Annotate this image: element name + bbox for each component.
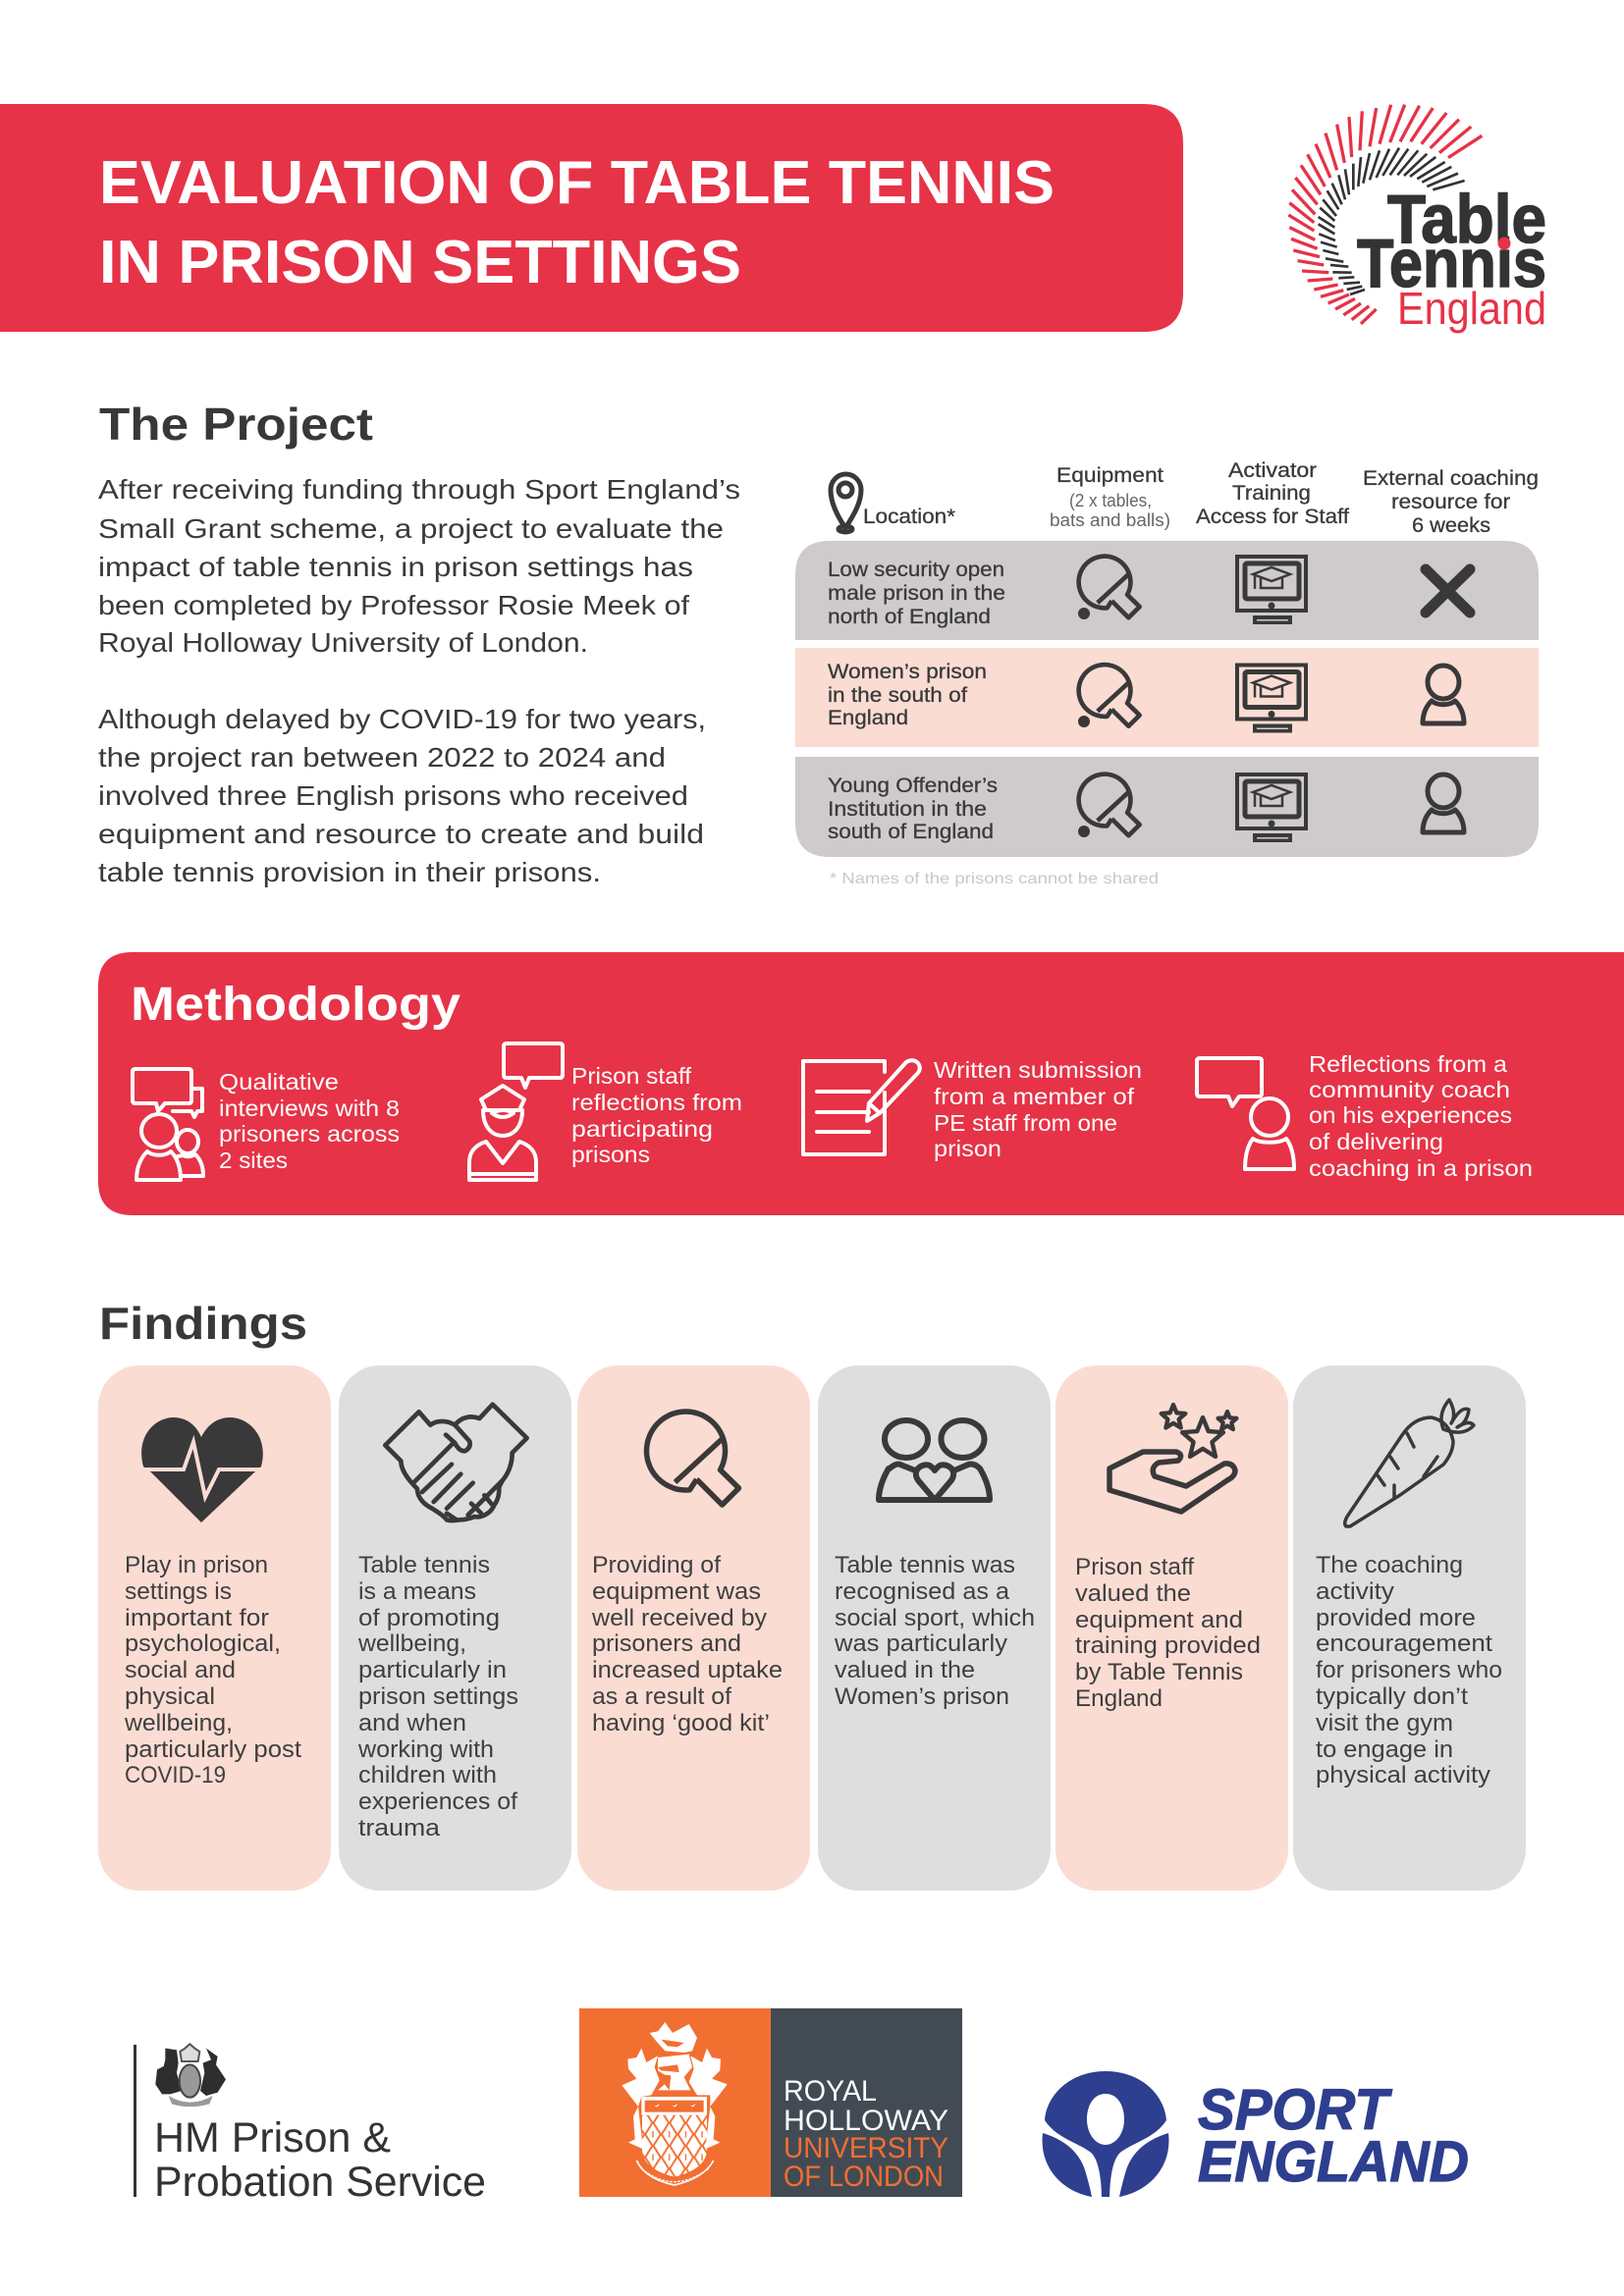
table header: resource for xyxy=(1391,491,1510,513)
method: prison staff xyxy=(469,1043,742,1180)
text: particularly post xyxy=(125,1736,301,1763)
text: visit the gym xyxy=(1316,1710,1453,1736)
icon: royal crest xyxy=(155,2044,226,2107)
text: of promoting xyxy=(358,1605,500,1631)
text: settings is xyxy=(125,1578,232,1605)
icon: carrot xyxy=(1345,1400,1474,1526)
text block: project description: impact of table tennis in prison settings has xyxy=(98,552,693,582)
table header: Training xyxy=(1232,482,1311,505)
panel: finding 1 xyxy=(98,1365,331,1891)
row: women's prison: in the south of xyxy=(828,684,967,707)
method: written submission xyxy=(803,1057,1142,1161)
icon: person xyxy=(1423,666,1464,723)
icon: training monitor xyxy=(1237,557,1306,624)
icon: coach with speech bubble xyxy=(1197,1058,1294,1169)
row: young offender's institution: Institution in the xyxy=(828,798,987,821)
text: equipment was xyxy=(592,1578,761,1605)
method: community coach: Reflections from a xyxy=(1309,1051,1507,1077)
method: community coach xyxy=(1197,1051,1533,1181)
icon: sport england figure xyxy=(1043,2071,1168,2197)
text: valued in the xyxy=(835,1657,975,1683)
text: by Table Tennis xyxy=(1075,1659,1243,1685)
logo: Table Tennis England: Tennis xyxy=(1357,225,1546,301)
text block: project description: Small Grant scheme, a project to evaluate the xyxy=(98,513,724,544)
text: valued the xyxy=(1075,1580,1191,1607)
icon: interview group xyxy=(133,1069,203,1180)
table header: Equipment xyxy=(1056,464,1164,487)
icon: bat xyxy=(1078,557,1140,619)
method: written submission: PE staff from one xyxy=(934,1110,1117,1136)
icon: bat xyxy=(1078,774,1140,837)
text: working with xyxy=(357,1736,494,1763)
text: typically don’t xyxy=(1316,1683,1468,1710)
text: experiences of xyxy=(358,1789,517,1815)
row: low security open male prison: male prison in the xyxy=(828,582,1005,605)
text: social and xyxy=(125,1657,236,1683)
row: young offender's institution: south of England xyxy=(828,821,994,843)
icon: document and pen xyxy=(803,1060,920,1154)
text: social sport, which xyxy=(835,1605,1035,1631)
text block: project description: Royal Holloway University of London. xyxy=(98,627,588,658)
text: equipment and xyxy=(1075,1607,1243,1633)
method: written submission: Written submission xyxy=(934,1057,1142,1083)
text block: project description: table tennis provision in their prisons. xyxy=(98,857,601,887)
icon: prison officer xyxy=(469,1043,563,1180)
method: community coach: community coach xyxy=(1309,1077,1510,1102)
method: prisoner interviews: Qualitative xyxy=(219,1069,339,1095)
table header xyxy=(831,459,1539,537)
text: to engage in xyxy=(1316,1736,1453,1763)
text block: project description: equipment and resource to create and build xyxy=(98,819,704,849)
icon: handshake xyxy=(385,1405,527,1521)
table: prison provision xyxy=(795,459,1539,887)
text: is a means xyxy=(358,1578,476,1605)
text: Play in prison xyxy=(125,1552,268,1578)
icon: university crest xyxy=(622,2022,728,2185)
footnote: * Names of the prisons cannot be shared xyxy=(830,871,1159,887)
table header: Activator xyxy=(1228,459,1317,482)
method: prison staff: participating xyxy=(571,1116,713,1142)
text: physical activity xyxy=(1316,1762,1490,1789)
logo: Royal Holloway University of London: OF LONDON xyxy=(784,2161,944,2193)
text: Women’s prison xyxy=(835,1683,1009,1710)
icon: training monitor xyxy=(1237,666,1306,732)
panel: finding 4 xyxy=(818,1365,1051,1891)
title: EVALUATION OF TABLE TENNIS xyxy=(99,149,1055,217)
method: community coach: of delivering xyxy=(1309,1129,1443,1154)
icon: training monitor xyxy=(1237,774,1306,842)
text block: project description: After receiving funding through Sport England’s xyxy=(98,474,740,505)
icon: hand with stars xyxy=(1110,1405,1237,1512)
text: was particularly xyxy=(834,1630,1007,1657)
logo: Royal Holloway University of London xyxy=(579,2008,962,2197)
logo: Table Tennis England: England xyxy=(1397,283,1546,334)
title banner xyxy=(0,104,1183,332)
method: prison staff: Prison staff xyxy=(571,1063,692,1089)
logo: HM Prison & Probation Service: HM Prison & xyxy=(154,2114,391,2162)
text block: project description: been completed by Professor Rosie Meek of xyxy=(98,590,689,620)
panel: methodology xyxy=(98,952,1624,1215)
row: young offender's institution: Young Offender’s xyxy=(828,774,998,797)
logo: Sport England xyxy=(1043,2071,1469,2197)
row: women's prison xyxy=(795,648,1539,747)
text xyxy=(357,1552,518,1842)
text xyxy=(1316,1552,1502,1789)
icon: red radial strokes xyxy=(1288,105,1482,324)
icon: person xyxy=(1423,774,1464,832)
text: as a result of xyxy=(592,1683,731,1710)
row: women's prison: England xyxy=(828,707,908,729)
text: prisoners and xyxy=(592,1630,741,1657)
text: prison settings xyxy=(358,1683,518,1710)
text: Table tennis was xyxy=(835,1552,1015,1578)
table header: Access for Staff xyxy=(1196,506,1349,528)
text: activity xyxy=(1316,1578,1394,1605)
text: wellbeing, xyxy=(124,1710,233,1736)
table header: bats and balls) xyxy=(1050,510,1170,530)
text: psychological, xyxy=(125,1630,281,1657)
logo: Royal Holloway University of London: UNIVERSITY xyxy=(784,2132,948,2164)
icon: dark radial strokes xyxy=(1319,148,1465,294)
table header: 6 weeks xyxy=(1412,514,1490,537)
text: well received by xyxy=(591,1605,767,1631)
text: for prisoners who xyxy=(1316,1657,1502,1683)
text: increased uptake xyxy=(592,1657,783,1683)
text: provided more xyxy=(1316,1605,1476,1631)
text xyxy=(1075,1554,1261,1712)
text xyxy=(591,1552,783,1736)
method: written submission: prison xyxy=(934,1136,1001,1161)
method: prison staff: reflections from xyxy=(571,1090,742,1115)
title xyxy=(99,149,1055,296)
heading: Methodology: Methodology xyxy=(131,979,460,1031)
text: children with xyxy=(358,1762,497,1789)
text: training provided xyxy=(1075,1632,1261,1659)
method: prisoner interviews: 2 sites xyxy=(219,1148,288,1173)
logo: HM Prison & Probation Service xyxy=(134,2044,486,2206)
text: Prison staff xyxy=(1075,1554,1194,1580)
text: encouragement xyxy=(1316,1630,1492,1657)
text: having ‘good kit’ xyxy=(592,1710,770,1736)
method: community coach: on his experiences xyxy=(1309,1102,1512,1128)
icon: location pin xyxy=(831,474,861,532)
icon: cross xyxy=(1426,569,1470,613)
text block: project description: the project ran between 2022 to 2024 and xyxy=(98,742,666,773)
text: Table tennis xyxy=(358,1552,490,1578)
text: and when xyxy=(358,1710,466,1736)
panel: finding 3 xyxy=(577,1365,810,1891)
text: particularly in xyxy=(358,1657,507,1683)
text block: project description xyxy=(98,474,740,887)
icon: two people with heart xyxy=(879,1420,990,1500)
row: low security open male prison: Low security open xyxy=(828,559,1004,581)
method: prison staff: prisons xyxy=(571,1142,650,1167)
method: community coach: coaching in a prison xyxy=(1309,1155,1533,1181)
icon: table tennis bat xyxy=(647,1412,738,1505)
text: England xyxy=(1075,1685,1163,1712)
text: Providing of xyxy=(592,1552,721,1578)
table header: (2 x tables, xyxy=(1069,491,1152,510)
method: prisoner interviews: prisoners across xyxy=(219,1121,400,1147)
text xyxy=(124,1552,301,1789)
method: prisoner interviews: interviews with 8 xyxy=(219,1095,400,1121)
panel: finding 6 xyxy=(1293,1365,1526,1891)
logo: Royal Holloway University of London: HOLLOWAY xyxy=(784,2105,948,2137)
method: written submission: from a member of xyxy=(934,1084,1135,1109)
method: prisoner interviews xyxy=(133,1069,400,1180)
panel: finding 5 xyxy=(1056,1365,1288,1891)
row: young offender's institution xyxy=(795,757,1539,857)
logo: Sport England: SPORT xyxy=(1198,2078,1392,2142)
text: physical xyxy=(125,1683,215,1710)
title: IN PRISON SETTINGS xyxy=(99,229,741,296)
text: trauma xyxy=(358,1815,441,1842)
heading: Findings: Findings xyxy=(99,1298,307,1349)
icon: heart with pulse xyxy=(137,1417,267,1522)
text xyxy=(834,1552,1035,1710)
text: wellbeing, xyxy=(357,1630,466,1657)
text: The coaching xyxy=(1316,1552,1463,1578)
logo: HM Prison & Probation Service: Probation Service xyxy=(154,2159,486,2206)
text: important for xyxy=(125,1605,269,1631)
icon: bat xyxy=(1078,665,1140,727)
row: women's prison: Women’s prison xyxy=(828,661,987,683)
logo: Royal Holloway University of London: ROYAL xyxy=(784,2075,877,2108)
table header: Location* xyxy=(863,506,955,528)
heading: The Project: The Project xyxy=(99,399,373,450)
row: low security open male prison xyxy=(795,541,1539,640)
table header: External coaching xyxy=(1363,467,1539,490)
text: recognised as a xyxy=(835,1578,1010,1605)
logo: Sport England: ENGLAND xyxy=(1198,2130,1469,2194)
panel: finding 2 xyxy=(339,1365,571,1891)
text: COVID-19 xyxy=(125,1762,226,1789)
logo: Table Tennis England xyxy=(1288,105,1546,334)
text block: project description: involved three English prisons who received xyxy=(98,780,688,811)
logo: Table Tennis England: Table xyxy=(1387,181,1546,257)
row: low security open male prison: north of England xyxy=(828,606,991,628)
text block: project description: Although delayed by COVID-19 for two years, xyxy=(98,704,706,734)
